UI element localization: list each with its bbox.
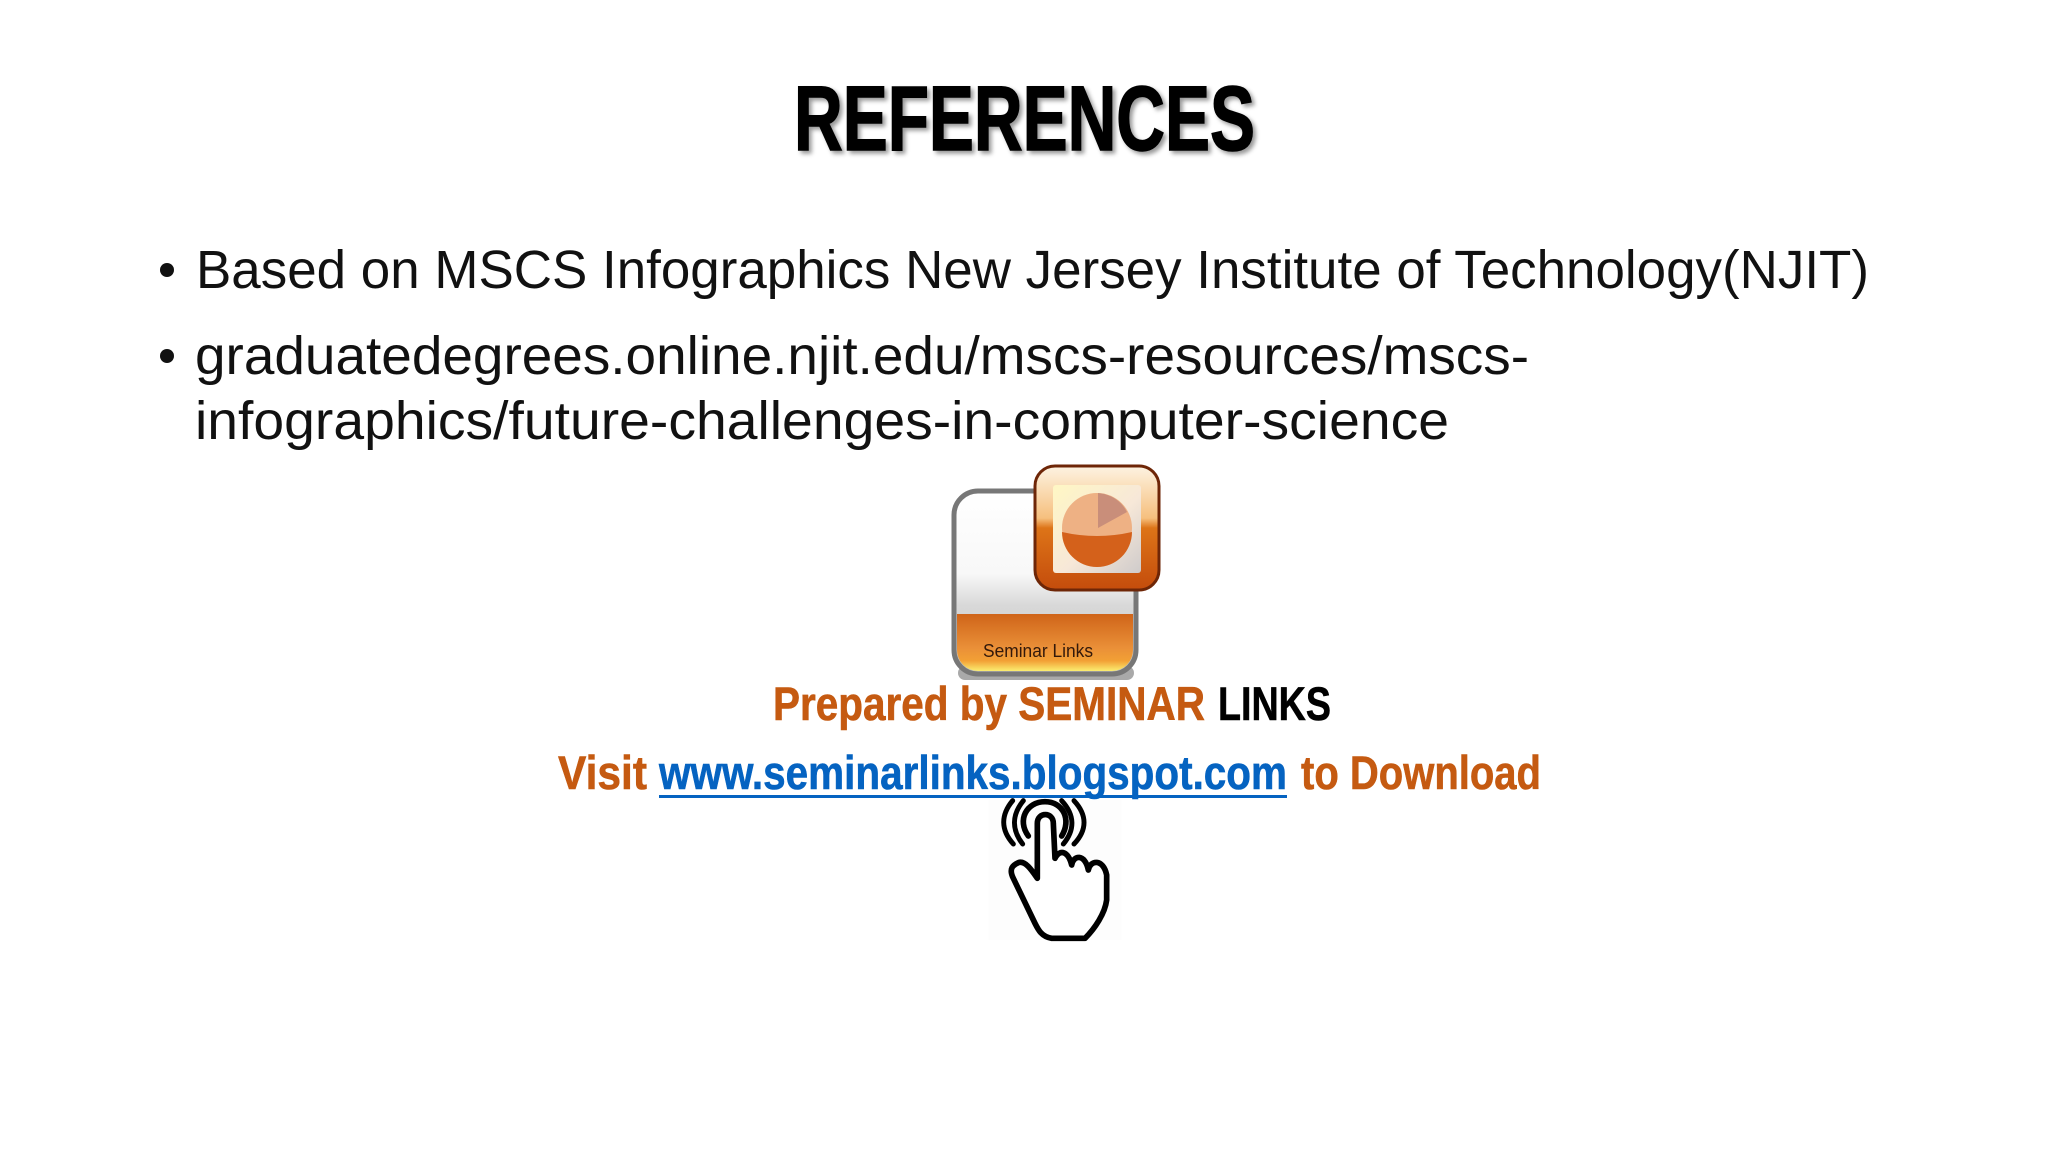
visit link line: Visit <box>558 746 647 799</box>
title: REFERENCES <box>794 68 1255 170</box>
reference item: url: graduatedegrees.online.njit.edu/mscs-resources/mscs- <box>195 326 1529 386</box>
icon: seminar links logo <box>954 466 1159 680</box>
reference item: url <box>160 326 1529 451</box>
visit link line: to Download <box>1301 746 1541 799</box>
prepared by line: Prepared by SEMINAR <box>773 677 1205 730</box>
prepared by line: LINKS <box>1218 677 1331 730</box>
visit link line: www.seminarlinks.blogspot.com <box>658 746 1287 799</box>
reference item: source: Based on MSCS Infographics New Jersey Institute of Technology(NJIT) <box>196 240 1869 300</box>
icon: tapping hand <box>988 800 1122 940</box>
icon: seminar links logo: Seminar Links <box>983 641 1093 661</box>
reference list <box>160 240 1869 451</box>
reference item: url: infographics/future-challenges-in-computer-science <box>195 391 1449 451</box>
